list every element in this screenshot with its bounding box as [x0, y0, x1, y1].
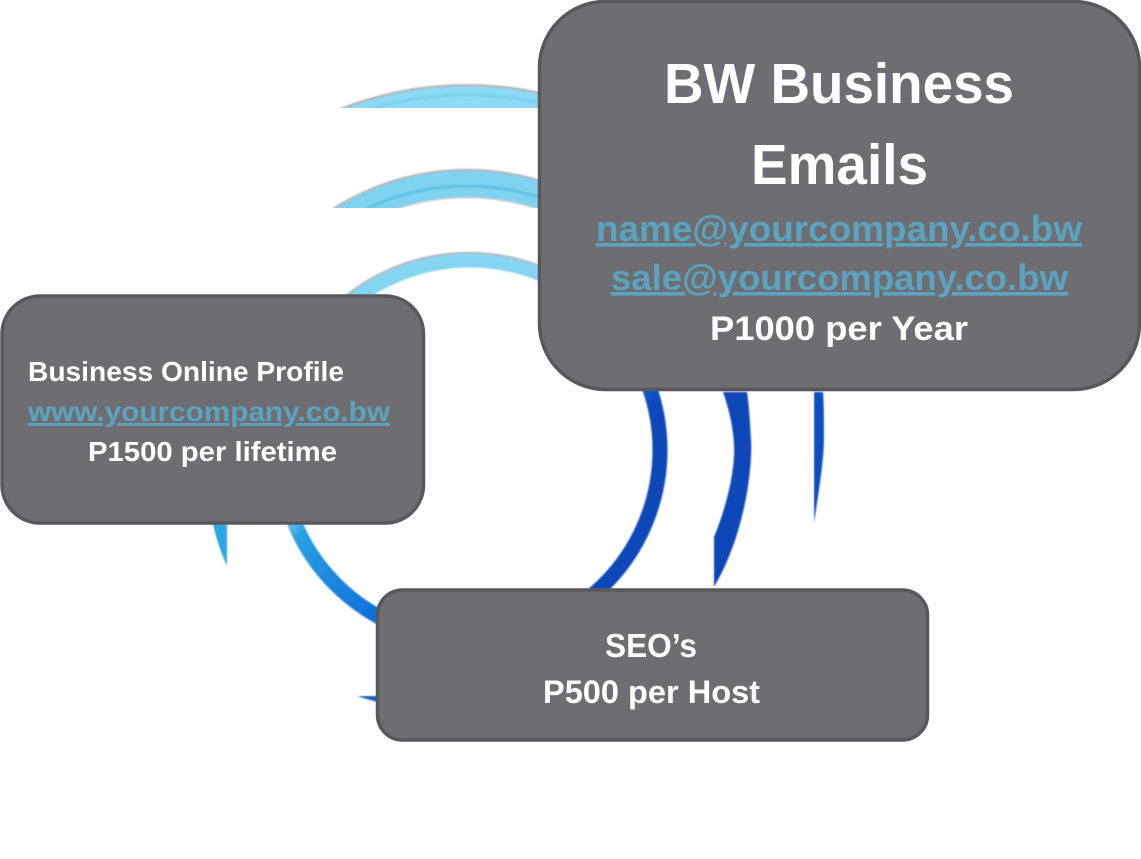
- heading: Business Online Profile: Business Online Profile: [28, 356, 344, 387]
- ring: bottom sliver: [357, 696, 378, 702]
- ring: lower left fragment: [213, 524, 227, 566]
- ring: inner circle: [280, 253, 660, 640]
- ring: middle right arc: [714, 392, 751, 587]
- panel: SEO: [378, 590, 928, 740]
- price: P1000 per Year: P1000 per Year: [710, 310, 968, 348]
- ring: middle top arc: [331, 168, 538, 208]
- link: website: www.yourcompany.co.bw: [27, 396, 390, 427]
- price: P1500 per lifetime: P1500 per lifetime: [88, 436, 337, 467]
- heading: Emails: Emails: [751, 133, 928, 197]
- price: P500 per Host: P500 per Host: [543, 674, 760, 710]
- link: name email: name@yourcompany.co.bw: [596, 208, 1083, 249]
- heading: SEO's: SEO’s: [605, 627, 697, 664]
- ring: outer right arc: [814, 392, 824, 523]
- link: sale email: sale@yourcompany.co.bw: [611, 257, 1069, 298]
- panel: BW Business Emails: [540, 2, 1140, 390]
- panel: Business Online Profile: [2, 296, 424, 523]
- ring: outer top arc: [338, 83, 538, 108]
- heading: BW Business: BW Business: [664, 52, 1014, 116]
